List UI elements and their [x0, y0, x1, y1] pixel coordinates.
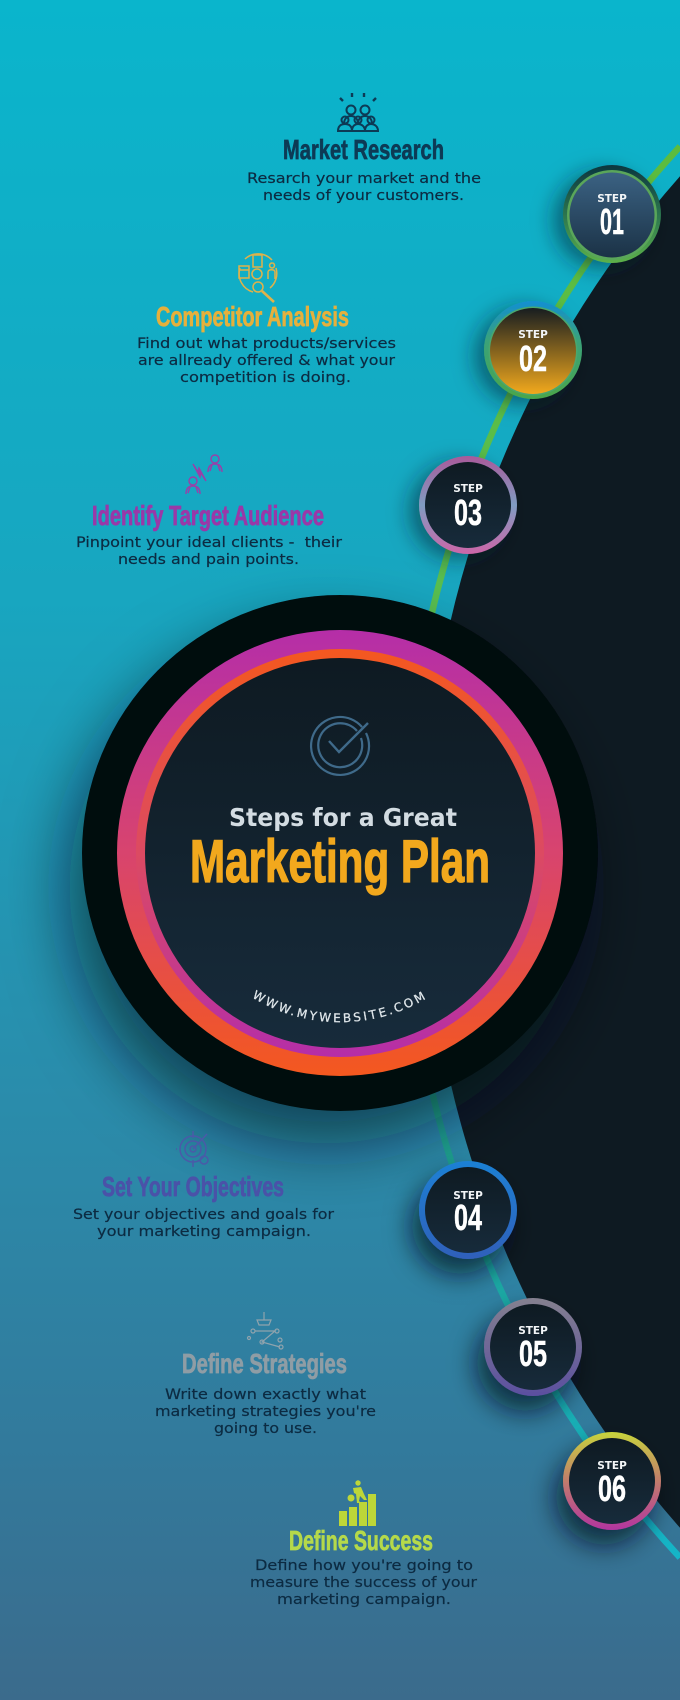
outer gradient ring: [117, 630, 563, 1076]
description: [155, 1387, 376, 1437]
step 04 badge: STEP: [453, 1190, 483, 1202]
panel: define success: [250, 1480, 477, 1608]
step 05 badge: STEP: [518, 1325, 548, 1337]
icon: climbing bars: [339, 1480, 376, 1526]
description: Set your objectives and goals for: [73, 1207, 334, 1223]
central circle: [42, 587, 598, 1152]
description: [250, 1558, 477, 1608]
heading: Set Your Objectives: [102, 1171, 284, 1202]
icon: competitor analysis: [239, 254, 277, 302]
description: are allready offered & what your: [138, 353, 395, 369]
description: needs of your customers.: [263, 188, 464, 204]
icon: strategy path: [248, 1312, 283, 1349]
step 05 badge: [484, 1298, 582, 1396]
step 01 badge: 01: [600, 201, 624, 242]
icon: audience: [186, 455, 222, 494]
description: [76, 535, 342, 568]
panel: competitor analysis: [137, 254, 396, 386]
step 03 badge: STEP: [453, 483, 483, 495]
subtitle: Steps for a Great: [229, 803, 457, 832]
heading: Define Strategies: [182, 1348, 347, 1379]
step 03 badge: [419, 456, 517, 554]
panel: define strategies: [155, 1312, 376, 1437]
step 04 badge: 04: [454, 1197, 482, 1238]
icon: check mark target: [311, 717, 369, 775]
description: going to use.: [214, 1421, 317, 1437]
description: Write down exactly what: [165, 1387, 366, 1403]
center disc: [145, 658, 535, 1048]
description: Resarch your market and the: [247, 171, 481, 187]
timeline curve: [404, 146, 680, 1558]
description: marketing strategies you're: [155, 1404, 376, 1420]
description: marketing campaign.: [277, 1592, 451, 1608]
step 03 badge: 03: [454, 492, 482, 533]
heading: Competitor Analysis: [156, 301, 349, 332]
icon: target: [176, 1131, 208, 1167]
panel: market research: [247, 93, 481, 204]
inner gradient ring: [136, 649, 544, 1057]
step 04 badge: [419, 1161, 517, 1259]
step 01 badge: STEP: [597, 193, 627, 205]
step 06 badge: [563, 1432, 661, 1530]
description: Define how you're going to: [255, 1558, 473, 1574]
heading: Identify Target Audience: [92, 500, 324, 531]
description: [73, 1207, 334, 1240]
heading: Market Research: [283, 134, 444, 165]
description: measure the success of your: [250, 1575, 477, 1591]
description: Find out what products/services: [137, 336, 396, 352]
step 01 badge: [563, 165, 661, 263]
website url: WWW.MYWEBSITE.COM: [254, 990, 426, 1022]
description: [137, 336, 396, 386]
description: your marketing campaign.: [97, 1224, 311, 1240]
step 06 badge: STEP: [597, 1460, 627, 1472]
description: Pinpoint your ideal clients - their: [76, 535, 342, 551]
step 06 badge: 06: [598, 1468, 626, 1509]
description: competition is doing.: [180, 370, 351, 386]
heading: Define Success: [289, 1525, 433, 1556]
panel: identify target audience: [76, 455, 342, 568]
step 02 badge: 02: [519, 338, 547, 379]
step 05 badge: 05: [519, 1333, 547, 1374]
description: [247, 171, 481, 204]
step 02 badge: [484, 301, 582, 399]
panel: set your objectives: [73, 1131, 334, 1240]
step 02 badge: STEP: [518, 329, 548, 341]
icon: market research group: [338, 93, 378, 131]
description: needs and pain points.: [118, 552, 299, 568]
dark curved panel: [424, 176, 680, 1528]
main title: Marketing Plan: [190, 828, 490, 895]
